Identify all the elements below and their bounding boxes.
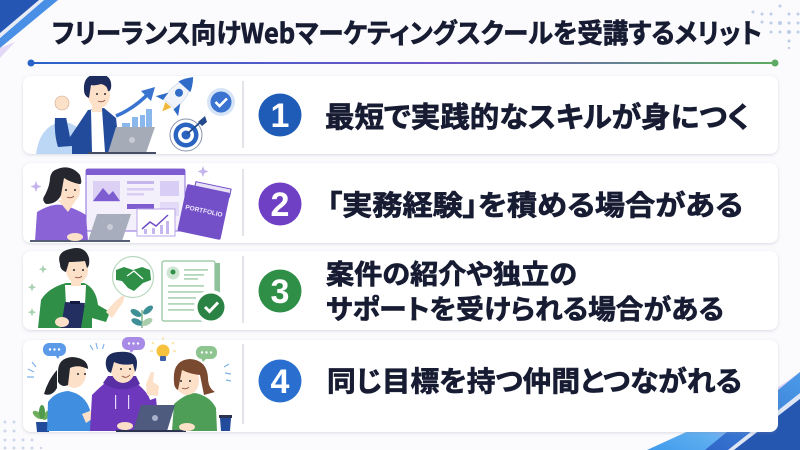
number badge 2: 2: [271, 186, 289, 224]
panel: merit 4: [23, 337, 778, 432]
panel: merit 1: [23, 67, 778, 154]
icon: coffee cup: [219, 415, 232, 431]
merit 4 text: 同じ目標を持つ仲間とつながれる: [327, 360, 742, 400]
divider: [242, 256, 244, 323]
icon: light bulb: [150, 337, 176, 361]
decoration: top-left corner: [0, 0, 58, 58]
number badge 3: [258, 270, 302, 312]
icon: speech bubbles: [43, 337, 217, 362]
panel: merit 2: [23, 163, 778, 243]
icon: rocket: [156, 76, 194, 116]
decoration: bottom-left dots: [4, 420, 42, 450]
title: フリーランス向けWebマーケティングスクールを受講するメリット: [52, 12, 762, 51]
divider: [242, 81, 244, 148]
number badge 4: 4: [271, 363, 290, 401]
illustration: three colleagues: [27, 337, 232, 432]
icon: check badge: [207, 88, 235, 116]
icon: plant: [129, 304, 155, 328]
icon: potted plant: [31, 405, 53, 432]
number badge 2: [258, 182, 302, 226]
icon: portfolio folder: PORTFOLIO: [185, 204, 223, 219]
number badge 3: 3: [271, 273, 289, 311]
number badge 1: 1: [271, 97, 289, 135]
icon: portfolio folder: [177, 180, 231, 240]
decoration: bottom-right corner: [647, 372, 800, 450]
divider: [242, 344, 244, 424]
title underline: [28, 60, 778, 66]
divider: [242, 169, 244, 236]
merit 3 text: サポートを受けられる場合がある: [326, 288, 724, 327]
merit 1 text: 最短で実践的なスキルが身につく: [325, 95, 749, 136]
illustration: man with handshake and document: [28, 248, 228, 328]
number badge 1: [258, 94, 302, 136]
icon: handshake: [112, 256, 154, 298]
panel: merit 3: [23, 248, 778, 330]
merit 3 text: 案件の紹介や独立の: [326, 253, 577, 292]
illustration: man with rocket and target: [36, 76, 235, 154]
merit 3 text: [326, 253, 724, 327]
merit 2 text: 「実務経験」を積める場合がある: [327, 184, 743, 224]
illustration: woman with portfolio: [30, 166, 231, 242]
number badge 4: [258, 360, 302, 402]
icon: target: [170, 116, 207, 151]
icon: document with check: [162, 261, 228, 324]
decoration: top-right dots: [752, 4, 800, 49]
